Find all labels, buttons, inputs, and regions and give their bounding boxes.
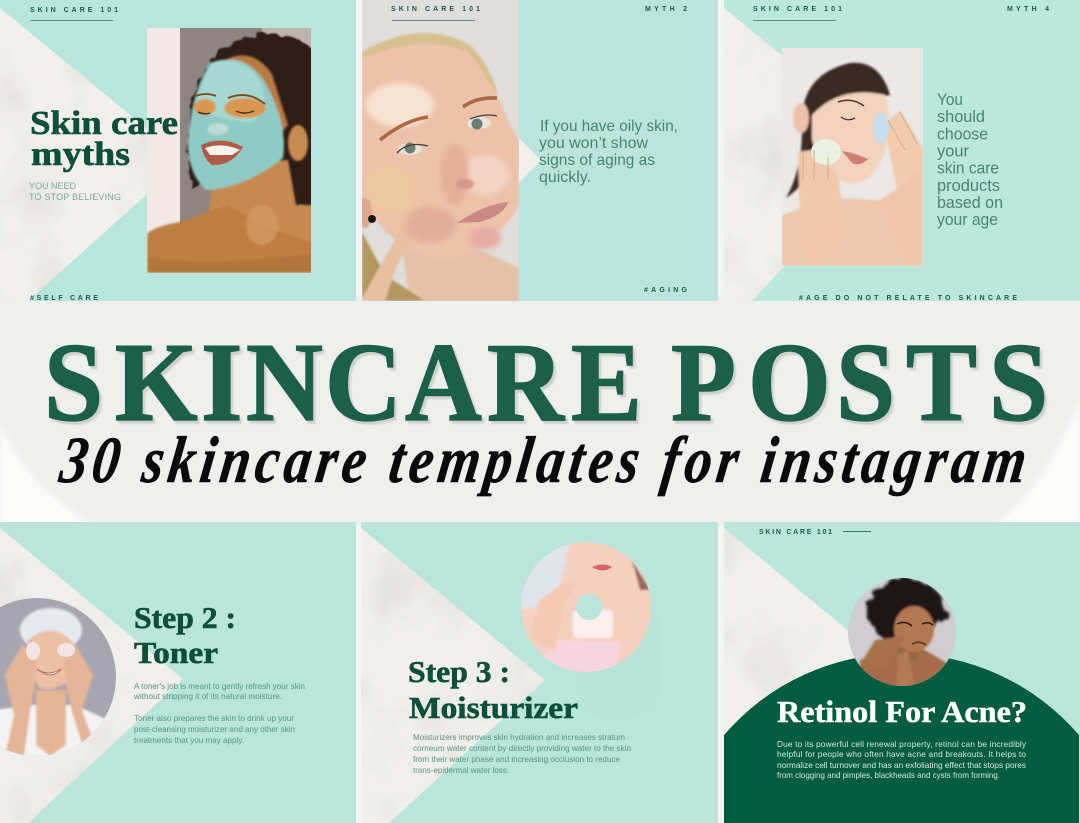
quote: oily skin myth — [539, 118, 678, 186]
label: myth 2: MYTH 2 — [645, 6, 687, 13]
body text: retinol: from clogging and pimples, blackheads and cysts from forming. — [777, 770, 1000, 780]
quote: oily skin myth: quickly. — [539, 169, 591, 186]
panel: myth 2 — [358, 0, 718, 301]
panel: step 2 toner — [0, 522, 356, 823]
heading: step 3 moisturizer: Moisturizer — [409, 690, 578, 725]
body text: retinol: Due to its powerful cell renewal property, retinol can be incredibly — [777, 739, 1027, 749]
body text: moisturizer: corneum water content by directly providing water to the skin — [413, 743, 631, 753]
body text: toner: treatments that you may apply. — [134, 735, 244, 745]
label: skin care 101: SKIN CARE 101 — [391, 6, 480, 13]
photo: woman touching acne — [848, 578, 956, 690]
panel: retinol for acne — [724, 522, 1080, 823]
body text: moisturizer: trans-epidermal water loss. — [413, 765, 509, 775]
marble triangle — [0, 528, 183, 823]
body text: moisturizer: from their water phase and increasing occlusion to reduce — [413, 754, 620, 764]
background band: fabric banner — [0, 296, 1080, 526]
quote: age myth: your — [937, 142, 969, 160]
heading: step 3 moisturizer: Step 3 : — [408, 654, 510, 689]
marble triangle — [724, 8, 790, 301]
label: skin care 101 — [759, 529, 871, 536]
marble arrow tip — [519, 138, 541, 183]
body text: retinol — [777, 739, 1027, 780]
heading: step 2 toner: Step 2 : — [134, 600, 236, 635]
quote: oily skin myth: If you have oily skin, — [540, 118, 678, 135]
label: skin care 101: SKIN CARE 101 — [753, 6, 842, 13]
label: skin care 101 — [391, 6, 480, 21]
label: skin care 101: SKIN CARE 101 — [759, 529, 832, 536]
body text: retinol: helpful for people who often have acne and breakouts. It helps to — [777, 749, 1026, 759]
heading: step 2 toner — [134, 600, 236, 670]
banner title: skincare posts: SKINCARE POSTS — [44, 321, 1048, 445]
subheading: you need to stop believing: TO STOP BELIEVING — [29, 192, 121, 202]
body text: toner: A toner's job is meant to gently refresh your skin — [134, 681, 305, 691]
body text: moisturizer — [413, 732, 631, 775]
panel: myth 4 — [724, 0, 1080, 302]
quote: oily skin myth: signs of aging as — [539, 152, 655, 169]
heading: step 3 moisturizer — [408, 654, 578, 725]
decorative pale rounded shape — [575, 590, 662, 721]
body text: toner: post-cleansing moisturizer and any other skin — [134, 724, 295, 734]
heading: skin care myths: myths — [31, 136, 130, 173]
green arch — [724, 653, 1079, 823]
photo: woman with green face mask — [147, 28, 318, 273]
heading: retinol for acne: Retinol For Acne? — [777, 694, 1027, 729]
subheading: you need to stop believing — [29, 181, 121, 202]
body text: moisturizer: Moisturizers improves skin hydration and increases stratum — [413, 732, 625, 742]
photo: woman holding moisturizer jar — [521, 542, 651, 672]
panel: skin care myths cover — [0, 0, 356, 302]
quote: age myth: choose — [937, 124, 988, 144]
panel: step 3 moisturizer — [361, 522, 718, 823]
quote: age myth — [937, 90, 1003, 229]
quote: age myth: should — [937, 107, 985, 126]
label: aging hashtag: #AGING — [644, 287, 688, 294]
label: skin care 101 — [753, 6, 842, 21]
quote: age myth: You — [937, 90, 963, 109]
label: skin care 101 — [30, 7, 118, 21]
photo: woman with cotton pads — [782, 48, 923, 266]
quote: oily skin myth: you won’t show — [539, 135, 648, 152]
hair — [189, 34, 318, 208]
quote: age myth: skin care — [937, 158, 999, 178]
marble triangle — [724, 528, 908, 823]
body text: toner: without stripping it of its natural moisture. — [133, 691, 282, 701]
mint hole in photo — [576, 594, 602, 620]
heading: skin care myths: Skin care — [30, 105, 178, 142]
marble triangle — [361, 528, 545, 823]
photo: woman with oily skin — [358, 0, 519, 301]
label: myth 4: MYTH 4 — [1007, 6, 1049, 13]
body text: toner — [133, 681, 305, 745]
subheading: you need to stop believing: YOU NEED — [29, 181, 76, 191]
body text: retinol: normalize cell turnover and has an exfoliating effect that stops pores — [777, 760, 1026, 770]
heading: skin care myths — [30, 105, 178, 173]
body text: toner: Toner also prepares the skin to drink up your — [134, 713, 294, 723]
photo: woman with cotton pads on eyes — [0, 598, 116, 756]
quote: age myth: products — [937, 176, 1000, 195]
label: skin care 101: SKIN CARE 101 — [30, 7, 118, 14]
marble triangle — [0, 8, 185, 301]
label: self care hashtag: #SELF CARE — [30, 295, 98, 302]
quote: age myth: your age — [937, 210, 998, 229]
quote: age myth: based on — [937, 193, 1003, 212]
heading: step 2 toner: Toner — [134, 635, 218, 670]
label: age hashtag: #AGE DO NOT RELATE TO SKINCARE — [799, 295, 1017, 302]
